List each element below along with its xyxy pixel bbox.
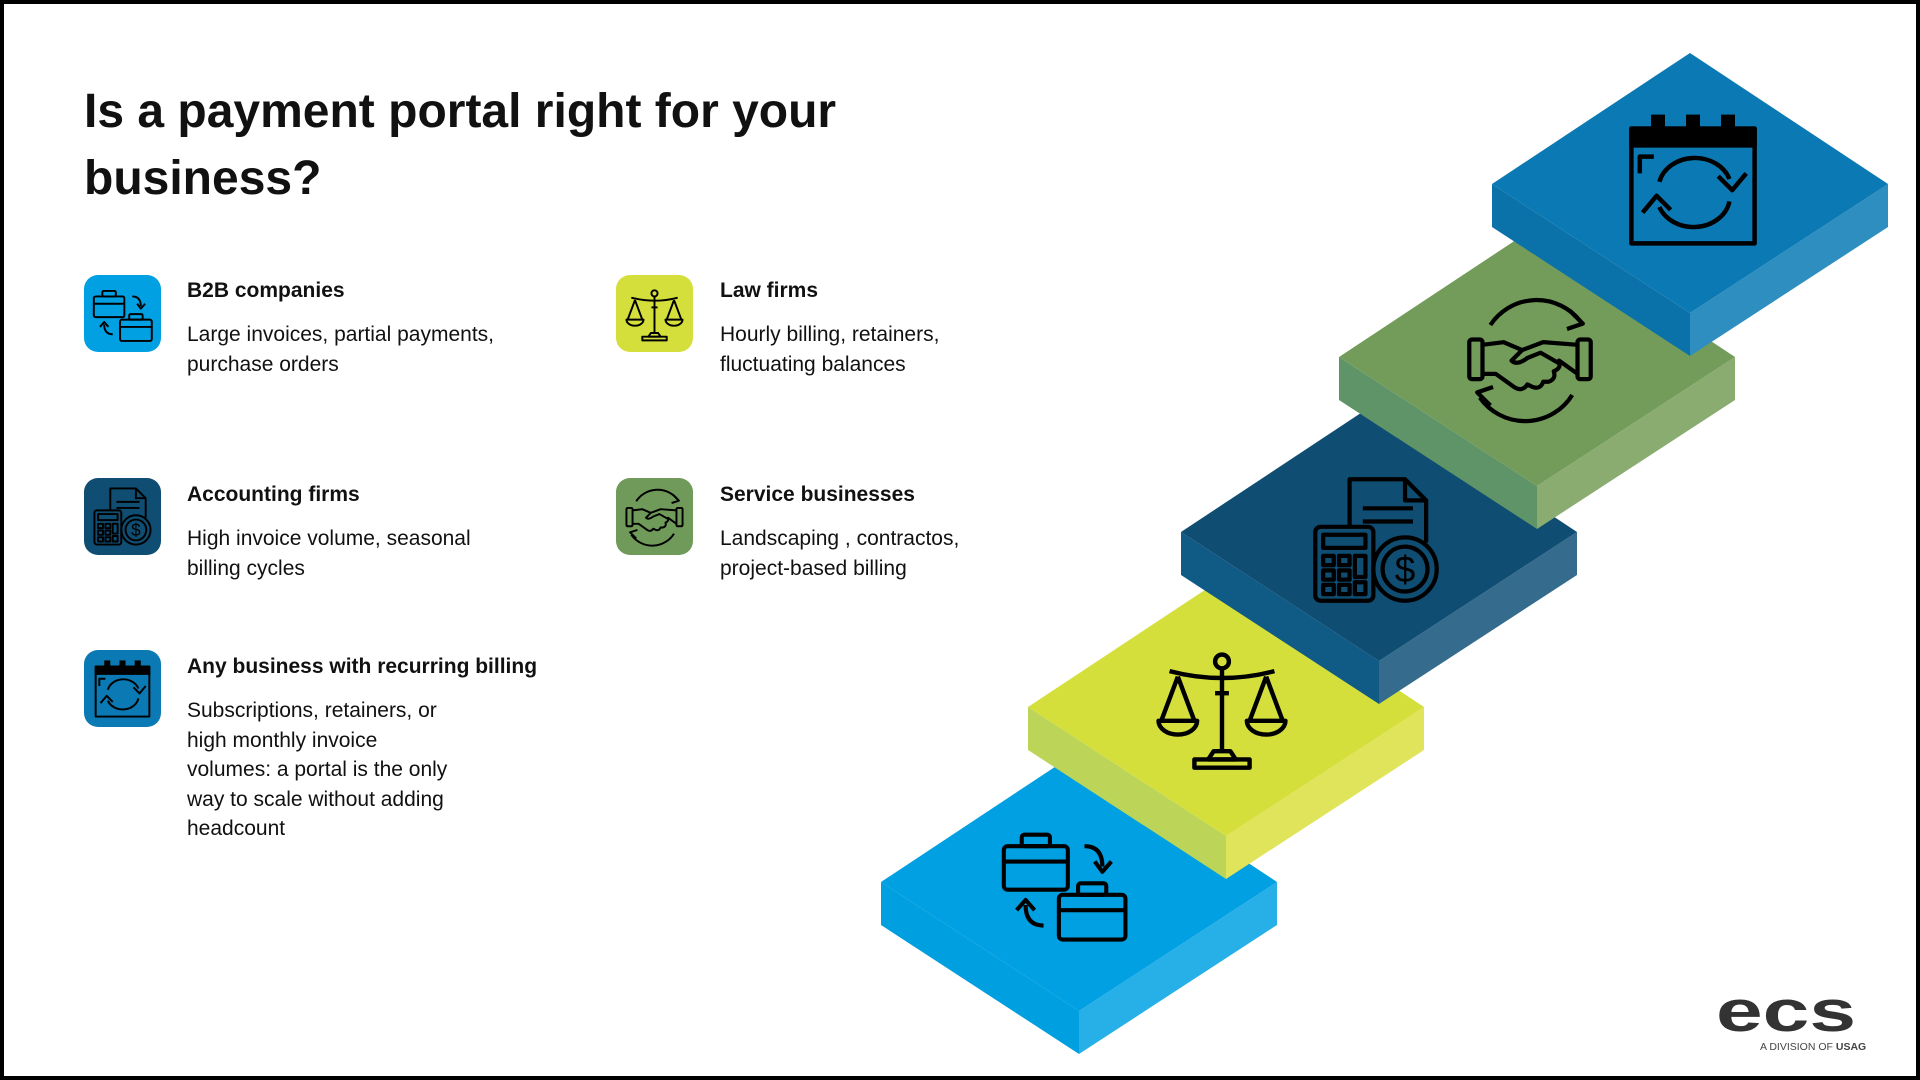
item: Recurring billing [84,650,537,840]
item: Recurring billing: high monthly invoice [187,728,377,752]
item: Accounting firms [84,478,471,580]
item: Law firms: fluctuating balances [720,352,906,376]
item: Recurring billing: volumes: a portal is the only [187,758,447,781]
item: Law firms: Law firms [720,279,818,302]
item: B2B companies [84,275,494,376]
step 5: Recurring [1492,53,1888,356]
logo: ecs [1716,985,1866,1053]
icon: calculator [84,478,161,555]
item: Recurring billing: Any business with recurring billing [187,655,537,678]
icon: briefcases [84,275,161,352]
title: Is a payment portal right for your [84,85,836,138]
step 4: Service [1339,226,1735,529]
icon: scale [616,275,693,352]
item: Service businesses: Service businesses [720,483,915,506]
title [84,85,836,205]
item: Recurring billing: Subscriptions, retainers, or [187,699,437,722]
item: Service businesses: Landscaping , contractos, [720,527,959,550]
step 3: Accounting [1181,401,1577,704]
title: business? [84,152,321,205]
item: Service businesses: project-based billing [720,556,907,580]
item: Recurring billing: way to scale without adding [187,788,444,810]
item: B2B companies: Large invoices, partial payments, [187,323,494,346]
item: Accounting firms: billing cycles [187,556,305,580]
icon: handshake [616,478,693,555]
item: B2B companies: purchase orders [187,352,339,376]
logo: ecs: A DIVISION OF USAG [1760,1041,1866,1053]
item: Law firms: Hourly billing, retainers, [720,323,939,346]
item: B2B companies: B2B companies [187,279,345,302]
item: Service businesses [616,478,959,580]
item: Recurring billing: headcount [187,817,285,840]
step 1: B2B [881,751,1277,1054]
item: Accounting firms: High invoice volume, seasonal [187,527,471,550]
icon: calendar [84,650,161,727]
item: Law firms [616,275,939,376]
step 2: Law [1028,576,1424,879]
item: Accounting firms: Accounting firms [187,483,360,506]
